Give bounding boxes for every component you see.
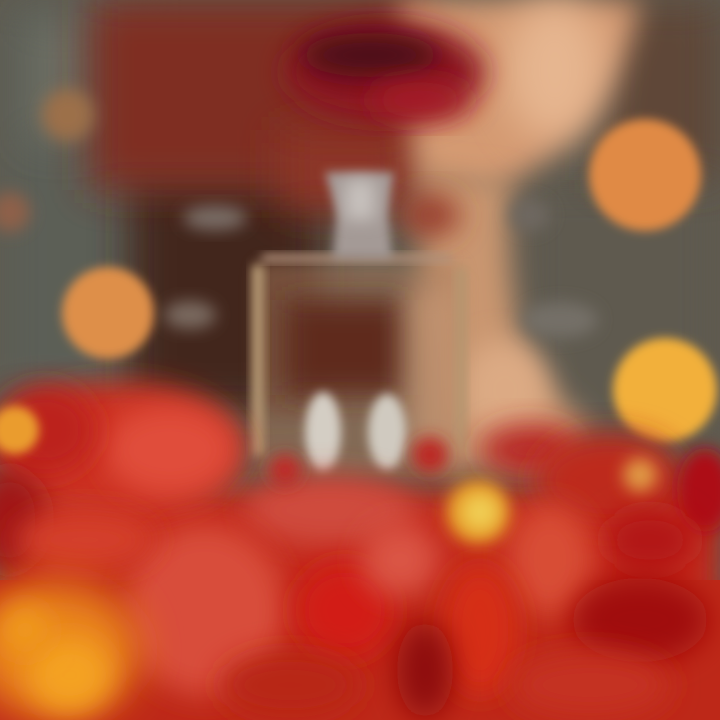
bottle cap xyxy=(325,172,394,258)
lips xyxy=(285,22,485,122)
bottle inner liquid xyxy=(285,300,405,395)
perfume bottle xyxy=(252,172,466,477)
bottle highlights xyxy=(305,392,341,472)
face and neck xyxy=(400,0,640,470)
foreground bokeh lights xyxy=(0,406,657,718)
background bokeh lights xyxy=(0,89,717,442)
red flower petals xyxy=(0,382,720,720)
bottle edges xyxy=(252,265,264,455)
bottle body xyxy=(256,262,461,477)
